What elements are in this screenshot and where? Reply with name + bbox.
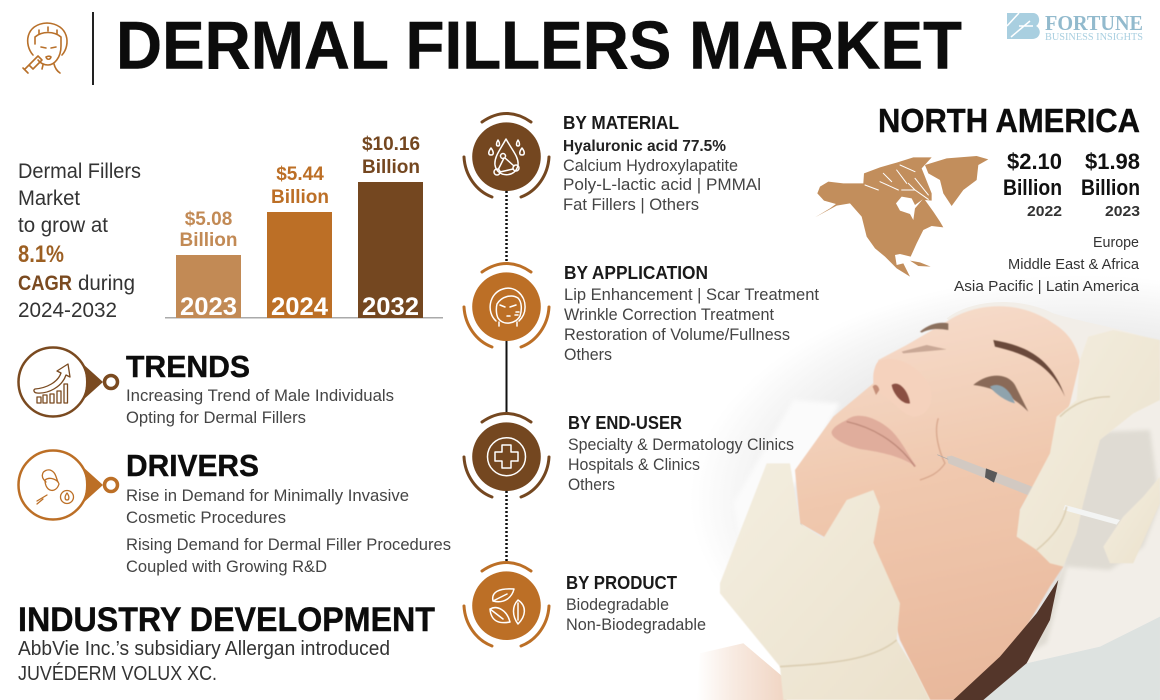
text: end-users list: [568, 435, 794, 494]
bar: 2032: $10.16: [362, 134, 420, 155]
icon: face with syringe: [23, 23, 67, 73]
bar: 2032: [358, 134, 423, 321]
text: drivers: Cosmetic Procedures: [126, 508, 286, 527]
title: DERMAL FILLERS MARKET: [116, 8, 962, 84]
stat: 2023: [1081, 149, 1140, 220]
text: materials list: Fat Fillers | Others: [563, 195, 699, 214]
panel: trends: [18, 348, 394, 427]
text block: CAGR summary: Dermal Fillers: [18, 160, 141, 183]
stat: 2022: 2022: [1027, 204, 1062, 220]
map: north america: [815, 156, 988, 277]
text block: CAGR summary: 8.1%: [18, 241, 64, 268]
logo: Fortune Business Insights: BUSINESS INSIGHTS: [1045, 32, 1143, 43]
text block: CAGR summary: CAGR: [18, 272, 72, 295]
text: trends: Increasing Trend of Male Individuals: [126, 386, 394, 405]
bar: 2032: 2032: [362, 293, 419, 321]
text block: CAGR summary: Market: [18, 187, 80, 210]
stat: 2023: $1.98: [1085, 149, 1140, 174]
stat: 2022: $2.10: [1007, 149, 1062, 174]
heading: industry development: INDUSTRY DEVELOPMENT: [18, 601, 435, 639]
icon: growth chart in pin: [18, 348, 118, 416]
heading: north america: NORTH AMERICA: [878, 102, 1140, 139]
heading: by application: BY APPLICATION: [564, 263, 708, 283]
bar: 2024: $5.44: [276, 164, 324, 185]
text: products list: Biodegradable: [566, 595, 669, 614]
text: other regions: [954, 234, 1140, 295]
text block: CAGR summary: to grow at: [18, 214, 108, 237]
text: applications list: Lip Enhancement | Scar Treatment: [564, 285, 819, 304]
text block: CAGR summary: during: [78, 272, 135, 295]
header divider: [92, 12, 94, 85]
icon: face with towel: [464, 264, 549, 347]
panel: by product: [464, 562, 706, 646]
text: end-users list: Others: [568, 475, 615, 494]
text: other regions: Europe: [1093, 234, 1139, 251]
text: materials list: Poly-L-lactic acid | PMMAl: [563, 175, 761, 194]
heading: by product: BY PRODUCT: [566, 573, 677, 593]
panel: industry development: [18, 601, 435, 685]
text: products list: [566, 595, 706, 634]
heading: trends: TRENDS: [126, 349, 250, 384]
heading: by end-user: BY END-USER: [568, 413, 682, 433]
icon: woman with droplet in pin: [18, 450, 118, 520]
panel: by material: [464, 113, 761, 214]
stat: 2022: Billion: [1003, 175, 1062, 200]
bar: 2024: 2024: [271, 293, 328, 321]
bar: 2023: Billion: [179, 230, 238, 251]
text: end-users list: Specialty & Dermatology Clinics: [568, 435, 794, 454]
panel: by application: [464, 263, 819, 364]
panel: drivers: [18, 448, 451, 576]
text: trends: [126, 386, 394, 427]
photo: dermal filler injection on patient's face: [680, 275, 1160, 700]
icon: molecule droplet: [464, 114, 549, 197]
stat: 2023: 2023: [1105, 204, 1140, 220]
panel: north america: [815, 102, 1140, 295]
bar: 2024: [267, 164, 332, 321]
text: drivers: Rise in Demand for Minimally Invasive: [126, 486, 409, 505]
text: materials list: Hyaluronic acid 77.5%: [563, 138, 726, 155]
connector lines between segment icons: [505, 191, 508, 561]
text: end-users list: Hospitals & Clinics: [568, 455, 700, 474]
stat: 2023: Billion: [1081, 175, 1140, 200]
text: other regions: Middle East & Africa: [1008, 256, 1140, 273]
text: materials list: Calcium Hydroxylapatite: [563, 156, 738, 175]
bar: 2024: Billion: [271, 187, 329, 208]
text: applications list: Restoration of Volume/Fullness: [564, 325, 790, 344]
text: industry development: AbbVie Inc.’s subsidiary Allergan introduced: [18, 638, 390, 660]
text: drivers: Coupled with Growing R&D: [126, 557, 327, 576]
text: drivers: [126, 486, 451, 576]
bar: 2023: [176, 209, 241, 321]
text: products list: Non-Biodegradable: [566, 615, 706, 634]
icon: recycling leaves: [464, 562, 549, 646]
text: materials list: [563, 138, 761, 214]
logo: Fortune Business Insights: [1007, 11, 1143, 43]
bar: 2023: 2023: [180, 293, 237, 321]
icon: medical cross: [464, 414, 549, 497]
text: drivers: Rising Demand for Dermal Filler Procedures: [126, 535, 451, 554]
text: applications list: Wrinkle Correction Treatment: [564, 305, 774, 324]
text block: CAGR summary: 2024-2032: [18, 299, 117, 322]
text block: CAGR summary: [18, 160, 141, 322]
text: other regions: Asia Pacific | Latin America: [954, 278, 1140, 295]
text: trends: Opting for Dermal Fillers: [126, 408, 306, 427]
logo: Fortune Business Insights: FORTUNE: [1045, 11, 1143, 35]
text: industry development: [18, 638, 390, 685]
text: applications list: [564, 285, 819, 364]
bar: 2023: $5.08: [185, 209, 232, 230]
text: applications list: Others: [564, 345, 612, 364]
panel: by end-user: [464, 413, 794, 497]
bar: 2032: Billion: [362, 157, 420, 178]
stat: 2022: [1003, 149, 1062, 220]
text: industry development: JUVÉDERM VOLUX XC.: [18, 662, 217, 685]
heading: by material: BY MATERIAL: [563, 113, 679, 133]
bar chart: market size: [165, 134, 443, 321]
heading: drivers: DRIVERS: [126, 448, 259, 483]
